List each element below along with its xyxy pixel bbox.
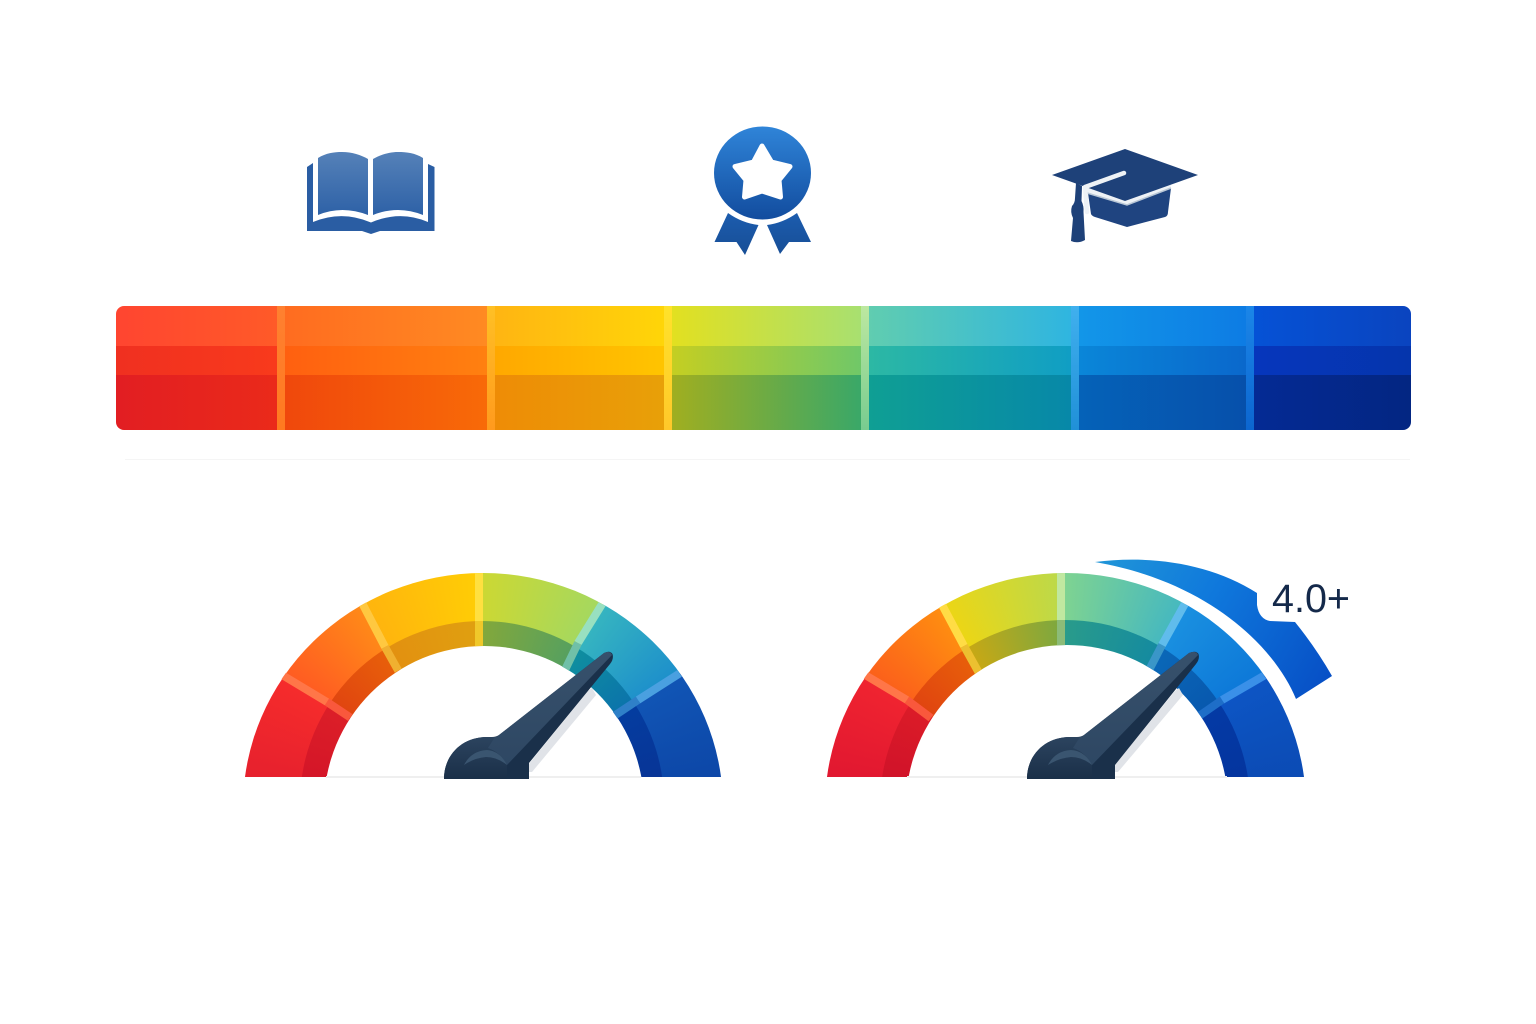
bar middle band <box>116 346 1411 375</box>
gauge: right with 4.0+ extension <box>827 560 1350 779</box>
highlighted 4.0+ arc <box>1095 560 1332 699</box>
needle <box>1027 652 1199 779</box>
bar top band <box>116 306 1411 346</box>
icon: graduation cap <box>1052 149 1198 242</box>
icon: open book <box>307 152 434 234</box>
bar bottom band <box>116 375 1411 430</box>
label: 4.0+: 4.0+ <box>1272 577 1350 621</box>
needle shadow <box>1114 688 1183 772</box>
needle <box>444 652 613 779</box>
gauge dividers <box>278 570 681 718</box>
needle shadow <box>528 688 596 772</box>
gradient scale bar <box>116 306 1411 430</box>
icon: award rosette <box>714 126 811 255</box>
bar dividers <box>277 306 1254 430</box>
gauge dividers <box>861 570 1266 718</box>
gauge: left <box>245 573 721 779</box>
